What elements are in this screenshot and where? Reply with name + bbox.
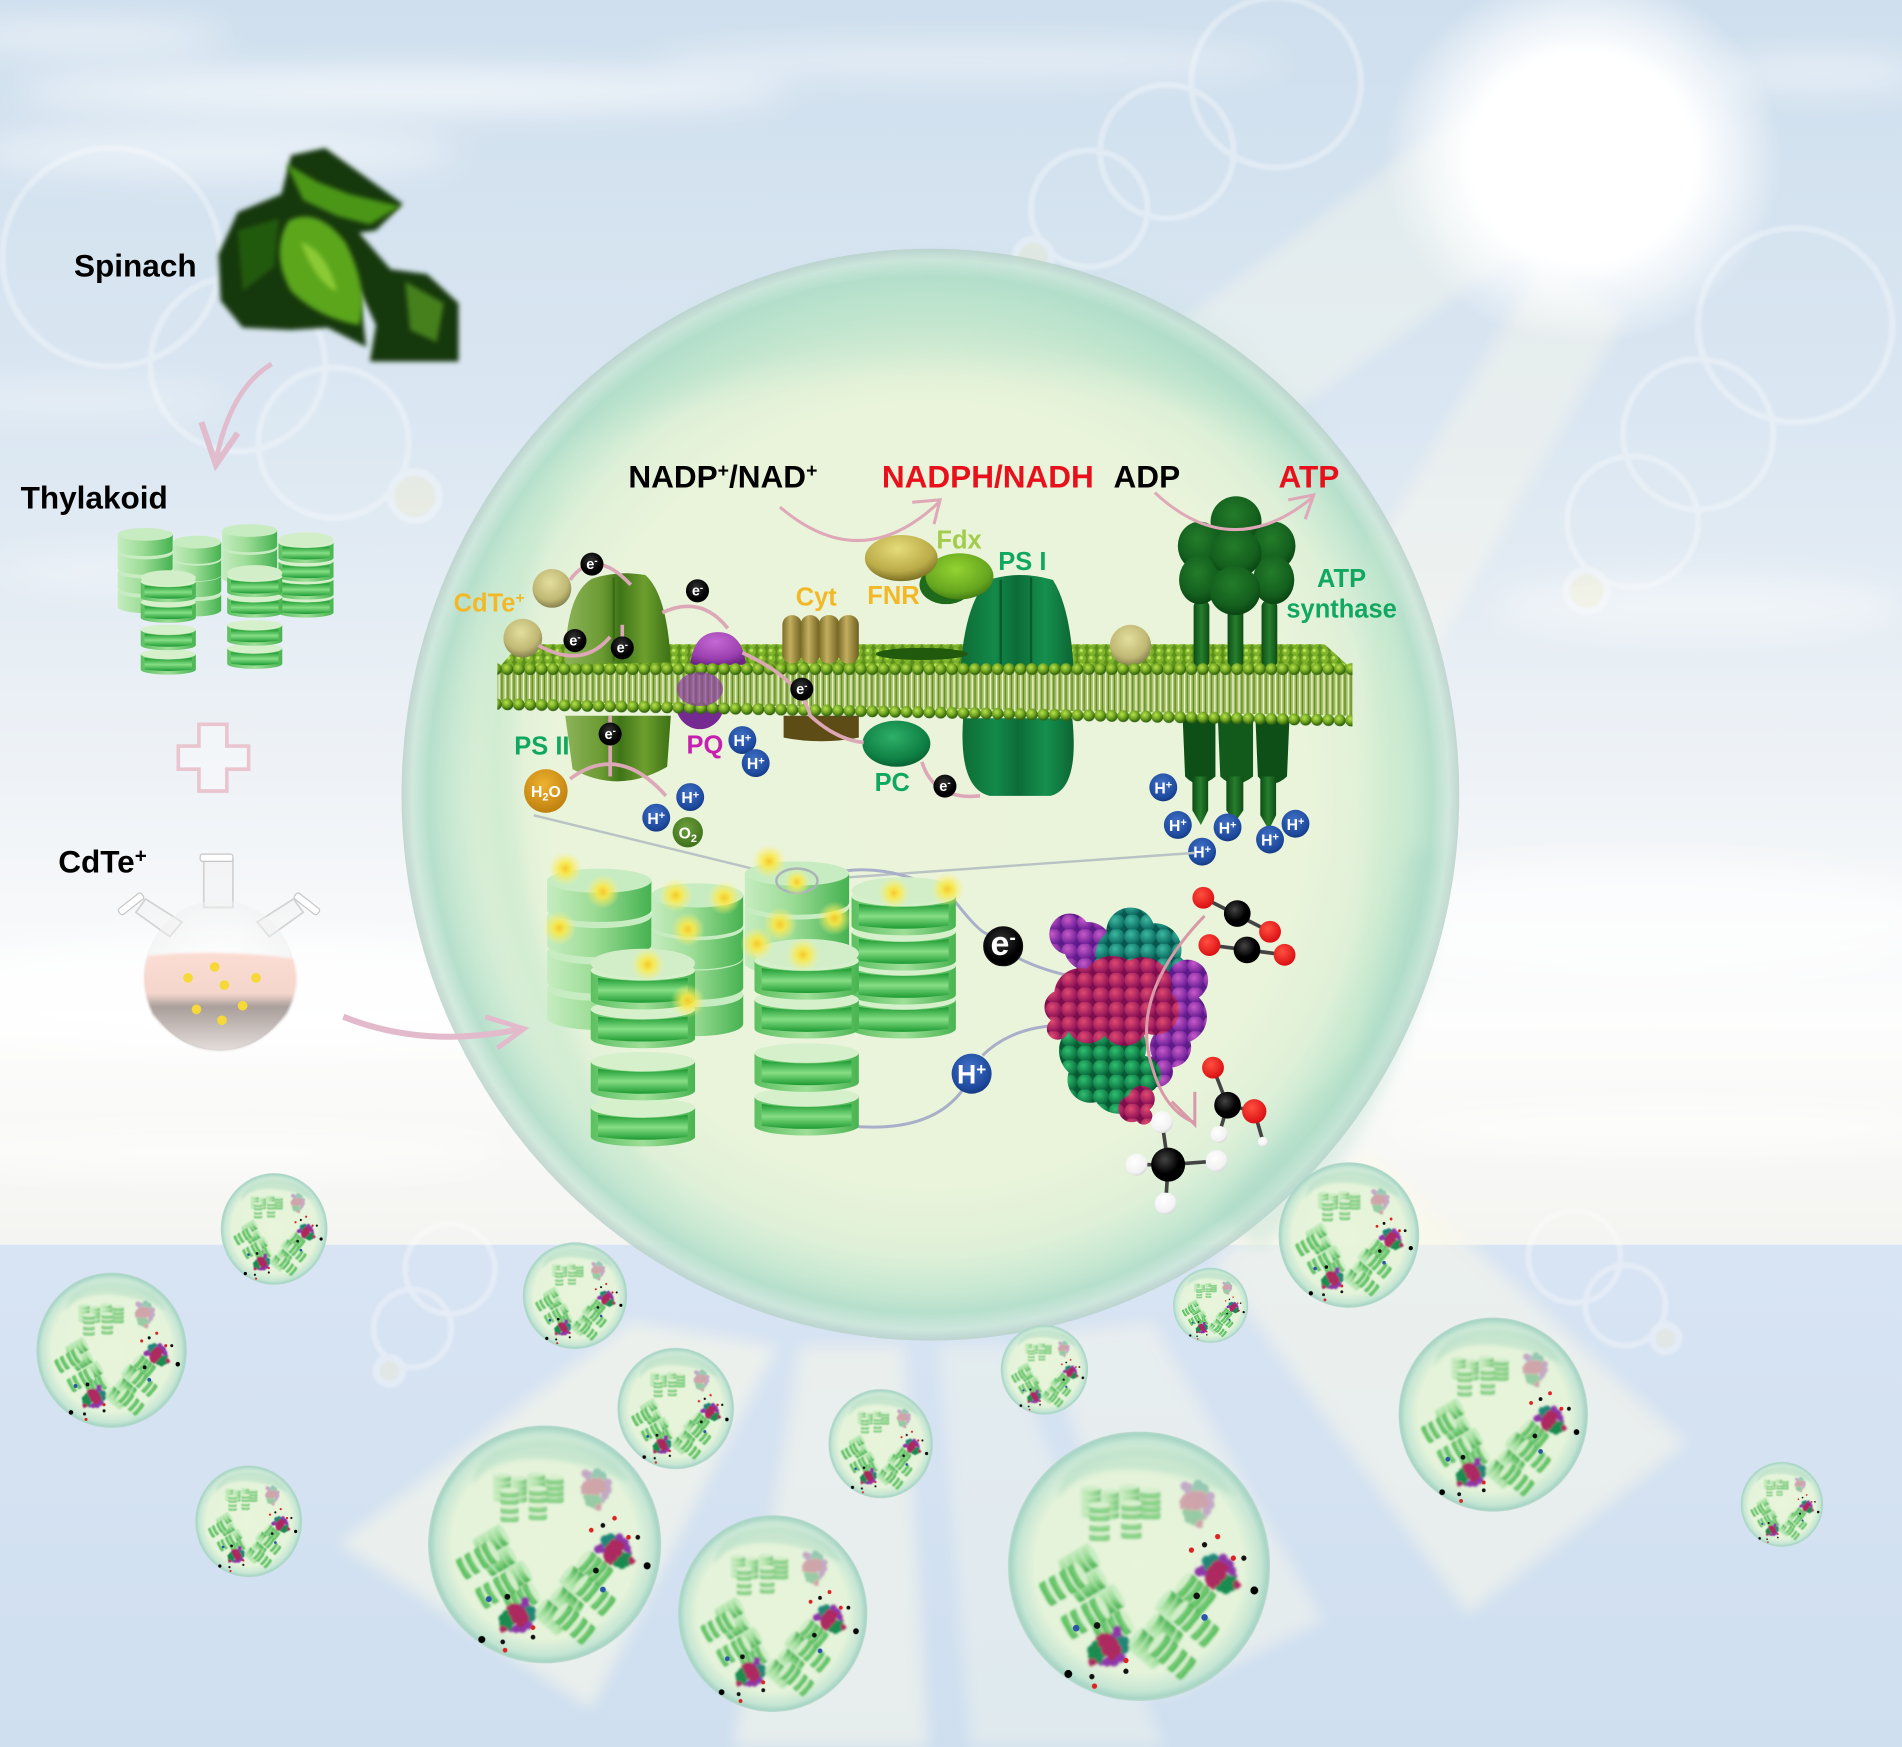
panel: large vesicle bubble <box>402 249 1459 1341</box>
small bubbles group <box>36 1162 1823 1712</box>
electrons: e <box>617 641 625 657</box>
protein: PQ middle <box>677 672 723 706</box>
electron carrier: - <box>1009 927 1016 949</box>
label: CdTe+: CdTe <box>454 589 515 617</box>
protein: PS I upper part <box>961 575 1074 667</box>
electrons: e <box>604 727 613 743</box>
electrons: e <box>569 633 577 649</box>
label: NADP+/NAD+: + <box>718 460 729 482</box>
label: FNR: FNR <box>867 582 920 610</box>
label: Thylakoid: Thylakoid <box>21 479 168 515</box>
electrons: e <box>939 779 947 795</box>
protein: PC <box>862 721 930 767</box>
protein: PQ lower part <box>676 678 724 729</box>
nanoparticle: CdTe balls <box>503 569 1151 666</box>
molecules CO2, formic acid, methane <box>1126 887 1295 1214</box>
protons: H <box>647 811 659 828</box>
protons: + <box>659 810 665 822</box>
protons: + <box>1205 844 1211 856</box>
protons: H <box>1219 820 1230 837</box>
label: PC: PC <box>875 769 910 797</box>
electrons <box>563 553 956 798</box>
label: PS I: PS I <box>998 548 1046 576</box>
electrons: - <box>613 726 616 737</box>
panel: thylakoid membrane scheme <box>454 459 1397 866</box>
label: PQ: PQ <box>687 731 723 759</box>
arrow: ATP formation <box>1155 493 1314 530</box>
electron carrier <box>984 925 1023 966</box>
arrow: CO2 reduction <box>1147 916 1205 1125</box>
protein: PS II upper part <box>565 573 671 665</box>
sky background <box>0 0 1902 1245</box>
sun <box>1383 0 1783 346</box>
icon: three-neck flask <box>117 854 321 1051</box>
protein: Cyt tubes <box>782 615 859 664</box>
protons: H <box>1261 833 1273 850</box>
protons: + <box>1298 816 1304 828</box>
arrow: NADP reduction <box>780 500 940 541</box>
arrow: spinach to thylakoid <box>201 364 272 465</box>
proton carrier: H <box>957 1059 976 1089</box>
protons: H <box>1287 817 1298 834</box>
icon: plus sign <box>178 724 249 791</box>
callout ring on thylakoid <box>776 869 818 893</box>
electron carrier: e <box>990 925 1009 963</box>
molecule: water: O <box>548 784 561 801</box>
label: Cyt: Cyt <box>796 583 837 611</box>
electrons: - <box>700 583 703 594</box>
protons: + <box>758 755 765 767</box>
dark gap on membrane <box>876 648 968 660</box>
protons: H <box>1193 845 1205 862</box>
protein: PS I lower part <box>962 718 1074 796</box>
electrons: - <box>577 633 581 644</box>
large thylakoid stacks <box>547 861 956 1146</box>
electrons: - <box>594 556 598 567</box>
decorative lens bubbles <box>2 0 1892 1384</box>
protein: ATP synthase head and stems <box>1178 496 1295 667</box>
zoom callout lines <box>534 815 1195 880</box>
protons: H <box>733 733 745 750</box>
protein: ATP synthase lower part <box>1183 718 1289 830</box>
electrons: e <box>586 557 594 573</box>
arrow: flask to bubble <box>343 1017 524 1048</box>
label: CdTe+: CdTe <box>58 843 135 879</box>
molecule: oxygen <box>673 817 703 847</box>
protons: + <box>1180 817 1187 829</box>
proton carrier: + <box>976 1060 986 1079</box>
electrons: e <box>796 682 804 698</box>
molecule: oxygen: 2 <box>691 833 697 845</box>
protons: H <box>681 790 693 807</box>
label: ATP synthase: ATP <box>1317 565 1366 593</box>
label: NADPH/NADH: NADPH/NADH <box>882 459 1094 495</box>
electrons: - <box>804 681 807 692</box>
protons <box>642 726 1309 866</box>
protein: FNR <box>865 535 938 581</box>
membrane top surface <box>497 644 1353 670</box>
label: ATP: ATP <box>1279 459 1339 495</box>
membrane lipid bilayer <box>497 662 1353 727</box>
label: ATP synthase: synthase <box>1286 596 1397 624</box>
protons: + <box>693 789 699 801</box>
protons: + <box>1273 832 1279 844</box>
molecule: water: H <box>531 784 542 801</box>
protein: Cyt lower part <box>784 716 859 741</box>
light rays from the sun <box>340 109 1686 1747</box>
proton carrier <box>952 1054 992 1094</box>
CdTe quantum dots on thylakoid <box>542 844 964 1018</box>
protons: + <box>745 732 751 744</box>
molecule: oxygen: O <box>679 825 691 842</box>
electrons: e <box>692 584 700 600</box>
molecule: water: 2 <box>542 792 548 804</box>
label: CdTe+: + <box>515 590 525 607</box>
electron transfer arrows <box>539 564 980 796</box>
label: NADP+/NAD+: + <box>806 460 817 482</box>
enzyme hydrogenase <box>1044 907 1208 1125</box>
icon: small thylakoid stacks <box>118 524 334 675</box>
spinach leaves <box>218 148 459 362</box>
label: NADP+/NAD+: NADP <box>628 459 718 495</box>
label: NADP+/NAD+: /NAD <box>729 459 806 495</box>
electrons: - <box>625 640 628 651</box>
protein: Fdx <box>919 553 993 604</box>
molecule: water <box>524 769 568 813</box>
protons: + <box>1230 820 1236 832</box>
protein: PS II lower part <box>565 716 671 781</box>
protons: H <box>1154 780 1166 797</box>
label: ATP synthase <box>1286 565 1397 624</box>
sea background <box>0 1245 1902 1747</box>
protons: H <box>747 756 758 773</box>
protons: + <box>1166 780 1172 792</box>
electrons: - <box>947 778 951 789</box>
label: Spinach: Spinach <box>74 248 197 284</box>
label: CdTe+: + <box>135 845 147 868</box>
label: ADP: ADP <box>1114 459 1180 495</box>
connectors to enzyme <box>843 870 1074 1127</box>
protons: H <box>1169 818 1180 835</box>
label: PS II: PS II <box>514 733 570 761</box>
label: Fdx: Fdx <box>936 526 982 554</box>
protein: PQ dome <box>690 632 746 665</box>
